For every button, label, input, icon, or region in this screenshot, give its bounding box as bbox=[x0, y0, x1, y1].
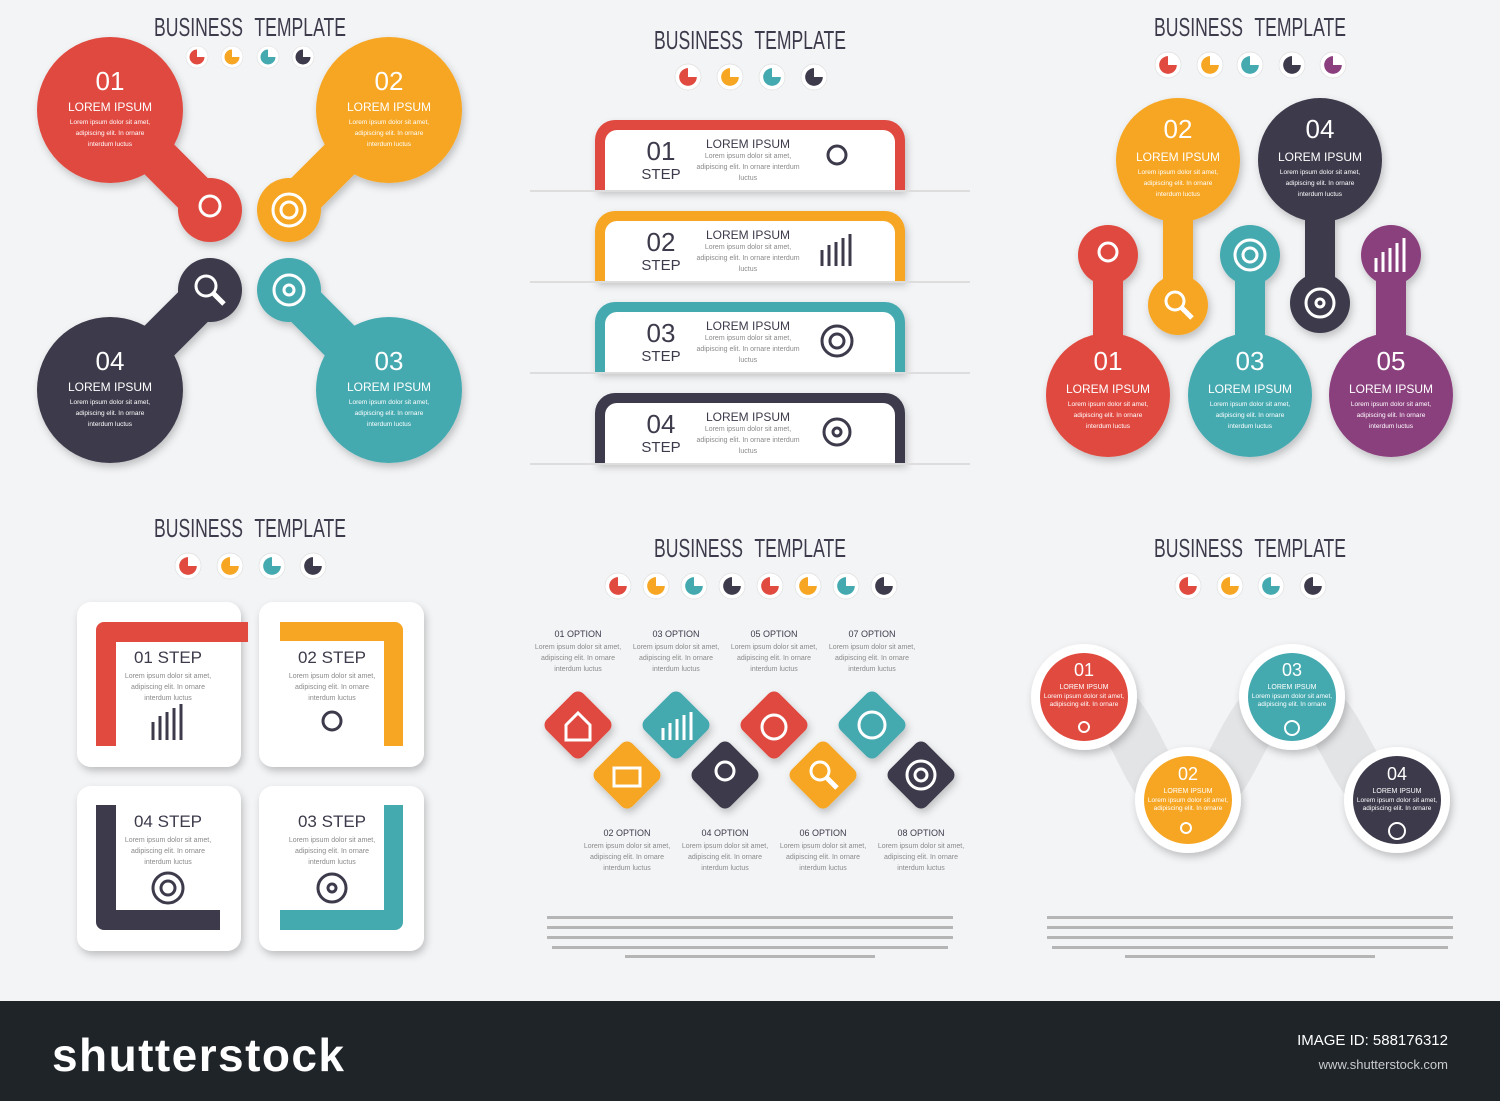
panel: bottom-middle options: adipiscing elit. In ornare bbox=[835, 655, 909, 662]
panel: bottom-left step cards: Lorem ipsum dolor sit amet, bbox=[125, 837, 211, 844]
panel: bottom-middle options: interdum luctus bbox=[701, 865, 749, 872]
panel: top-middle steps: STEP bbox=[641, 257, 681, 274]
panel: top-right metaballs: adipiscing elit. In ornare bbox=[1357, 412, 1426, 419]
panel: bottom-middle options: adipiscing elit. In ornare bbox=[786, 854, 860, 861]
panel: bottom-right circles: Lorem ipsum dolor sit amet, bbox=[1357, 797, 1437, 804]
panel: bottom-left step cards: 01 STEP bbox=[134, 648, 202, 667]
panel: bottom-middle options: Lorem ipsum dolor sit amet, bbox=[633, 644, 719, 651]
paragraph bbox=[1047, 916, 1453, 958]
panel: top-left metaball: Lorem ipsum dolor sit amet, bbox=[70, 399, 150, 406]
panel: bottom-middle options: interdum luctus bbox=[848, 666, 896, 673]
panel: top-right metaballs: 03 bbox=[1236, 346, 1264, 376]
panel: bottom-right circles: LOREM IPSUM bbox=[1372, 788, 1422, 795]
panel: bottom-middle options: adipiscing elit. In ornare bbox=[884, 854, 958, 861]
title: BUSINESS TEMPLATE bbox=[1154, 533, 1346, 563]
panel: top-left metaball bbox=[37, 12, 462, 463]
panel: bottom-middle options: 08 OPTION bbox=[897, 828, 945, 838]
panel: bottom-middle options: adipiscing elit. In ornare bbox=[688, 854, 762, 861]
panel: top-middle steps: luctus bbox=[739, 175, 758, 182]
panel: top-right metaballs: interdum luctus bbox=[1369, 423, 1414, 430]
panel: top-left metaball: interdum luctus bbox=[367, 421, 412, 428]
panel: top-right metaballs: LOREM IPSUM bbox=[1349, 382, 1433, 396]
image id: IMAGE ID: 588176312 bbox=[1297, 1032, 1448, 1049]
panel: bottom-middle options: interdum luctus bbox=[554, 666, 602, 673]
panel: bottom-left step cards: interdum luctus bbox=[308, 695, 356, 702]
panel: top-left metaball: interdum luctus bbox=[367, 141, 412, 148]
pie icons bbox=[605, 573, 897, 599]
panel: top-middle steps: LOREM IPSUM bbox=[706, 410, 790, 424]
panel: bottom-right circles: Lorem ipsum dolor sit amet, bbox=[1044, 693, 1124, 700]
panel: top-right metaballs: interdum luctus bbox=[1086, 423, 1131, 430]
panel: bottom-middle options: interdum luctus bbox=[750, 666, 798, 673]
panel: bottom-middle options: 07 OPTION bbox=[848, 629, 896, 639]
panel: bottom-left step cards: interdum luctus bbox=[308, 859, 356, 866]
title: BUSINESS TEMPLATE bbox=[1154, 12, 1346, 42]
panel: top-left metaball: LOREM IPSUM bbox=[68, 380, 152, 394]
panel: top-right metaballs: 04 bbox=[1306, 114, 1334, 144]
panel: top-left metaball: interdum luctus bbox=[88, 421, 133, 428]
panel: top-left metaball: LOREM IPSUM bbox=[68, 100, 152, 114]
panel: top-middle steps: Lorem ipsum dolor sit amet, bbox=[705, 335, 791, 342]
panel: top-right metaballs: LOREM IPSUM bbox=[1066, 382, 1150, 396]
panel: bottom-left step cards: 03 STEP bbox=[298, 812, 366, 831]
title: BUSINESS TEMPLATE bbox=[654, 533, 846, 563]
panel: bottom-left step cards: Lorem ipsum dolor sit amet, bbox=[125, 673, 211, 680]
panel: bottom-middle options bbox=[535, 533, 964, 958]
panel: bottom-middle options: Lorem ipsum dolor sit amet, bbox=[780, 843, 866, 850]
panel: top-right metaballs: Lorem ipsum dolor sit amet, bbox=[1210, 401, 1290, 408]
panel: top-middle steps: LOREM IPSUM bbox=[706, 228, 790, 242]
panel: bottom-middle options: Lorem ipsum dolor sit amet, bbox=[731, 644, 817, 651]
panel: top-left metaball: adipiscing elit. In ornare bbox=[76, 130, 145, 137]
panel: bottom-left step cards: Lorem ipsum dolor sit amet, bbox=[289, 673, 375, 680]
panel: bottom-middle options: Lorem ipsum dolor sit amet, bbox=[584, 843, 670, 850]
panel: top-middle steps bbox=[530, 25, 970, 464]
panel: bottom-middle options: interdum luctus bbox=[652, 666, 700, 673]
panel: top-middle steps: LOREM IPSUM bbox=[706, 137, 790, 151]
panel: bottom-right circles: adipiscing elit. In ornare bbox=[1050, 701, 1119, 708]
panel: top-left metaball: Lorem ipsum dolor sit amet, bbox=[349, 119, 429, 126]
logo: shutterstock bbox=[52, 1029, 344, 1081]
panel: top-middle steps: STEP bbox=[641, 439, 681, 456]
panel: top-middle steps: Lorem ipsum dolor sit amet, bbox=[705, 244, 791, 251]
panel: bottom-right circles: adipiscing elit. In ornare bbox=[1258, 701, 1327, 708]
panel: bottom-right circles bbox=[1031, 533, 1453, 958]
panel: top-right metaballs: interdum luctus bbox=[1156, 191, 1201, 198]
panel: bottom-right circles: LOREM IPSUM bbox=[1163, 788, 1213, 795]
panel: bottom-right circles: 04 bbox=[1387, 764, 1407, 784]
panel: top-right metaballs: interdum luctus bbox=[1228, 423, 1273, 430]
panel: bottom-left step cards: 02 STEP bbox=[298, 648, 366, 667]
panel: top-left metaball: 02 bbox=[375, 66, 403, 96]
panel: bottom-middle options: 01 OPTION bbox=[554, 629, 602, 639]
panel: bottom-middle options: Lorem ipsum dolor sit amet, bbox=[682, 843, 768, 850]
footer bar bbox=[0, 1001, 1500, 1101]
panel: top-middle steps: 01 bbox=[647, 136, 675, 166]
panel: bottom-middle options: 05 OPTION bbox=[750, 629, 798, 639]
panel: bottom-left step cards: 04 STEP bbox=[134, 812, 202, 831]
panel: top-middle steps: STEP bbox=[641, 166, 681, 183]
title: BUSINESS TEMPLATE bbox=[654, 25, 846, 55]
panel: top-left metaball: adipiscing elit. In ornare bbox=[355, 130, 424, 137]
panel: bottom-middle options: interdum luctus bbox=[897, 865, 945, 872]
panel: top-middle steps: luctus bbox=[739, 357, 758, 364]
panel: top-left metaball: LOREM IPSUM bbox=[347, 100, 431, 114]
panel: top-right metaballs: 02 bbox=[1164, 114, 1192, 144]
title: BUSINESS TEMPLATE bbox=[154, 12, 346, 42]
panel: top-left metaball: interdum luctus bbox=[88, 141, 133, 148]
panel: top-right metaballs: Lorem ipsum dolor sit amet, bbox=[1068, 401, 1148, 408]
panel: top-left metaball: Lorem ipsum dolor sit amet, bbox=[349, 399, 429, 406]
panel: top-middle steps: adipiscing elit. In ornare interdum bbox=[696, 437, 800, 444]
panel: bottom-middle options: adipiscing elit. In ornare bbox=[541, 655, 615, 662]
panel: top-left metaball: LOREM IPSUM bbox=[347, 380, 431, 394]
panel: top-left metaball: adipiscing elit. In ornare bbox=[76, 410, 145, 417]
title: BUSINESS TEMPLATE bbox=[154, 513, 346, 543]
panel: top-right metaballs: LOREM IPSUM bbox=[1208, 382, 1292, 396]
paragraph bbox=[547, 916, 953, 958]
panel: bottom-middle options: 06 OPTION bbox=[799, 828, 847, 838]
pie icons bbox=[675, 64, 827, 90]
panel: bottom-left step cards: adipiscing elit. In ornare bbox=[295, 848, 369, 855]
panel: top-right metaballs: Lorem ipsum dolor sit amet, bbox=[1351, 401, 1431, 408]
panel: bottom-right circles: 01 bbox=[1074, 660, 1094, 680]
panel: bottom-left step cards bbox=[77, 513, 424, 951]
panel: bottom-left step cards: adipiscing elit. In ornare bbox=[131, 684, 205, 691]
panel: bottom-middle options: interdum luctus bbox=[603, 865, 651, 872]
panel: bottom-middle options: interdum luctus bbox=[799, 865, 847, 872]
panel: bottom-right circles: LOREM IPSUM bbox=[1267, 684, 1317, 691]
panel: bottom-middle options: adipiscing elit. In ornare bbox=[639, 655, 713, 662]
panel: top-middle steps: Lorem ipsum dolor sit amet, bbox=[705, 153, 791, 160]
panel: bottom-left step cards: adipiscing elit. In ornare bbox=[295, 684, 369, 691]
pie icons bbox=[175, 553, 326, 579]
panel: top-middle steps: 04 bbox=[647, 409, 675, 439]
panel: top-left metaball: 01 bbox=[96, 66, 124, 96]
panel: bottom-right circles: Lorem ipsum dolor sit amet, bbox=[1148, 797, 1228, 804]
panel: bottom-middle options: 02 OPTION bbox=[603, 828, 651, 838]
panel: bottom-left step cards: Lorem ipsum dolor sit amet, bbox=[289, 837, 375, 844]
panel: bottom-right circles: 02 bbox=[1178, 764, 1198, 784]
panel: top-right metaballs: Lorem ipsum dolor sit amet, bbox=[1280, 169, 1360, 176]
panel: bottom-middle options: Lorem ipsum dolor sit amet, bbox=[878, 843, 964, 850]
panel: top-middle steps: LOREM IPSUM bbox=[706, 319, 790, 333]
panel: bottom-right circles: LOREM IPSUM bbox=[1059, 684, 1109, 691]
panel: top-middle steps: adipiscing elit. In ornare interdum bbox=[696, 164, 800, 171]
panel: bottom-left step cards: interdum luctus bbox=[144, 859, 192, 866]
panel: top-right metaballs: adipiscing elit. In ornare bbox=[1144, 180, 1213, 187]
footer bar: www.shutterstock.com bbox=[1318, 1057, 1448, 1072]
panel: bottom-middle options: 03 OPTION bbox=[652, 629, 700, 639]
panel: top-right metaballs: 01 bbox=[1094, 346, 1122, 376]
panel: top-right metaballs: interdum luctus bbox=[1298, 191, 1343, 198]
panel: top-right metaballs: LOREM IPSUM bbox=[1136, 150, 1220, 164]
panel: top-middle steps: adipiscing elit. In ornare interdum bbox=[696, 255, 800, 262]
panel: top-right metaballs: 05 bbox=[1377, 346, 1405, 376]
panel: top-left metaball: adipiscing elit. In ornare bbox=[355, 410, 424, 417]
panel: bottom-middle options: adipiscing elit. In ornare bbox=[737, 655, 811, 662]
panel: top-right metaballs: adipiscing elit. In ornare bbox=[1074, 412, 1143, 419]
icons bbox=[196, 194, 305, 305]
panel: top-right metaballs: Lorem ipsum dolor sit amet, bbox=[1138, 169, 1218, 176]
panel: top-right metaballs: adipiscing elit. In ornare bbox=[1286, 180, 1355, 187]
panel: bottom-left step cards: adipiscing elit. In ornare bbox=[131, 848, 205, 855]
panel: bottom-middle options: Lorem ipsum dolor sit amet, bbox=[535, 644, 621, 651]
panel: top-right metaballs bbox=[1046, 12, 1453, 457]
panel: top-middle steps: 02 bbox=[647, 227, 675, 257]
panel: top-middle steps: luctus bbox=[739, 266, 758, 273]
panel: top-middle steps: STEP bbox=[641, 348, 681, 365]
panel: top-middle steps: adipiscing elit. In ornare interdum bbox=[696, 346, 800, 353]
panel: bottom-right circles: adipiscing elit. In ornare bbox=[1154, 805, 1223, 812]
panel: bottom-left step cards: interdum luctus bbox=[144, 695, 192, 702]
pie icons bbox=[186, 46, 314, 68]
panel: bottom-middle options: adipiscing elit. In ornare bbox=[590, 854, 664, 861]
panel: top-middle steps: luctus bbox=[739, 448, 758, 455]
panel: top-right metaballs: adipiscing elit. In ornare bbox=[1216, 412, 1285, 419]
diamonds bbox=[541, 688, 958, 812]
panel: top-right metaballs: LOREM IPSUM bbox=[1278, 150, 1362, 164]
panel: bottom-right circles: adipiscing elit. In ornare bbox=[1363, 805, 1432, 812]
pie icons bbox=[1155, 52, 1346, 78]
panel: top-left metaball: Lorem ipsum dolor sit amet, bbox=[70, 119, 150, 126]
panel: top-middle steps: Lorem ipsum dolor sit amet, bbox=[705, 426, 791, 433]
panel: bottom-right circles: Lorem ipsum dolor sit amet, bbox=[1252, 693, 1332, 700]
panel: bottom-middle options: Lorem ipsum dolor sit amet, bbox=[829, 644, 915, 651]
panel: top-left metaball: 04 bbox=[96, 346, 124, 376]
panel: bottom-right circles: 03 bbox=[1282, 660, 1302, 680]
panel: bottom-middle options: 04 OPTION bbox=[701, 828, 749, 838]
panel: top-left metaball: 03 bbox=[375, 346, 403, 376]
panel: top-middle steps: 03 bbox=[647, 318, 675, 348]
pie icons bbox=[1175, 573, 1326, 599]
